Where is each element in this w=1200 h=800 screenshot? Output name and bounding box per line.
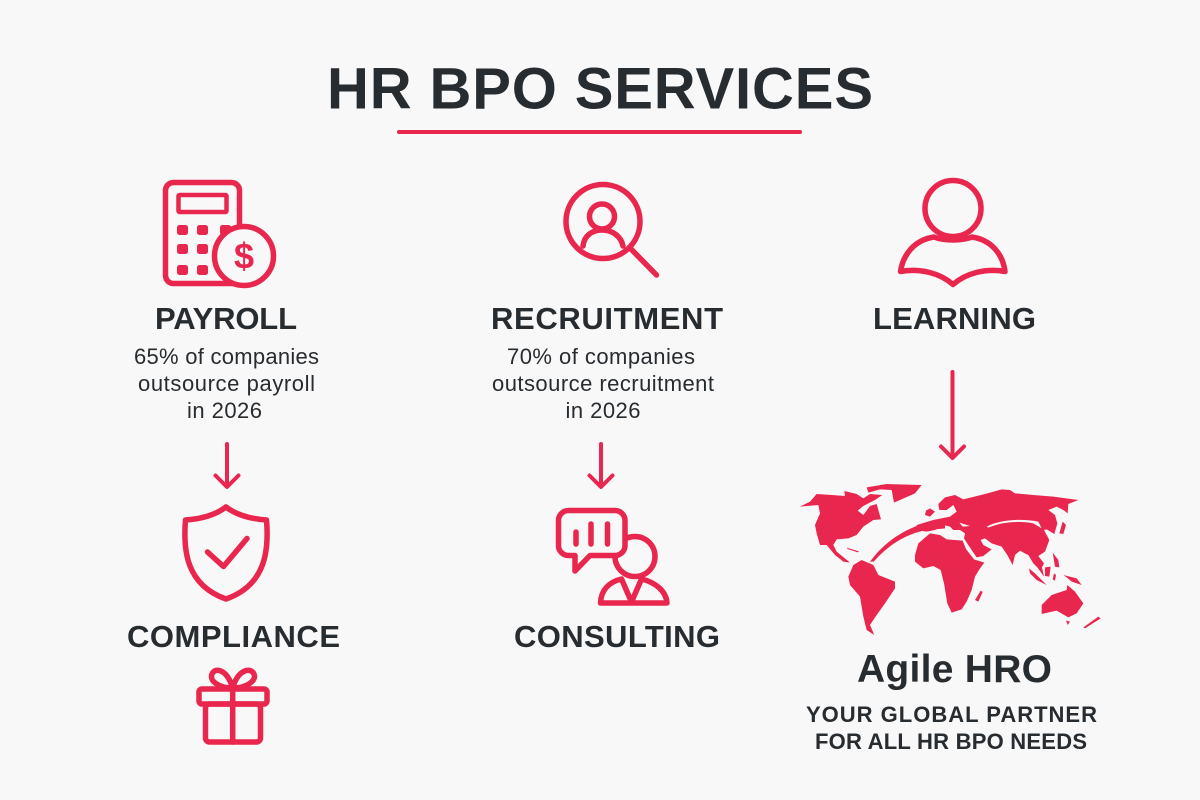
icon: consultant with speech bubble	[558, 510, 667, 603]
heading: consulting: CONSULTING	[514, 619, 720, 654]
heading: payroll: PAYROLL	[155, 301, 297, 336]
icon: world map	[800, 484, 1101, 635]
text: recruitment statistic: in 2026	[566, 398, 640, 423]
icon: gift box	[199, 670, 267, 742]
icon: calculator with dollar coin: $	[234, 236, 254, 276]
heading: compliance: COMPLIANCE	[127, 619, 340, 654]
icon: calculator with dollar coin	[166, 182, 274, 286]
arrow: recruitment to consulting	[590, 444, 612, 487]
icon: shield with check	[185, 507, 267, 599]
panel: payroll	[134, 182, 319, 423]
icon: person with open book	[900, 180, 1005, 284]
text: tagline: FOR ALL HR BPO NEEDS	[815, 729, 1087, 754]
heading: learning: LEARNING	[873, 301, 1036, 336]
panel: consulting	[514, 510, 720, 654]
panel: compliance	[127, 507, 340, 654]
text: recruitment statistic	[492, 344, 714, 423]
title underline	[397, 130, 802, 134]
heading: recruitment: RECRUITMENT	[491, 301, 723, 336]
icon: magnifier with person	[566, 184, 656, 275]
text: tagline	[806, 702, 1097, 754]
arrow: payroll to compliance	[216, 444, 238, 487]
panel: agile hro global partner	[800, 484, 1101, 754]
arrow: learning to world map	[941, 372, 964, 458]
text: payroll statistic: in 2026	[187, 398, 262, 423]
panel: learning	[873, 180, 1036, 336]
text: payroll statistic: outsource payroll	[138, 371, 315, 396]
title: HR BPO SERVICES	[327, 56, 873, 122]
heading: brand name: Agile HRO	[857, 648, 1052, 691]
panel: recruitment	[491, 184, 723, 423]
text: recruitment statistic: 70% of companies	[507, 344, 695, 369]
text: payroll statistic	[134, 344, 319, 423]
text: recruitment statistic: outsource recruitment	[492, 371, 714, 396]
text: payroll statistic: 65% of companies	[134, 344, 319, 369]
text: tagline: YOUR GLOBAL PARTNER	[806, 702, 1097, 727]
